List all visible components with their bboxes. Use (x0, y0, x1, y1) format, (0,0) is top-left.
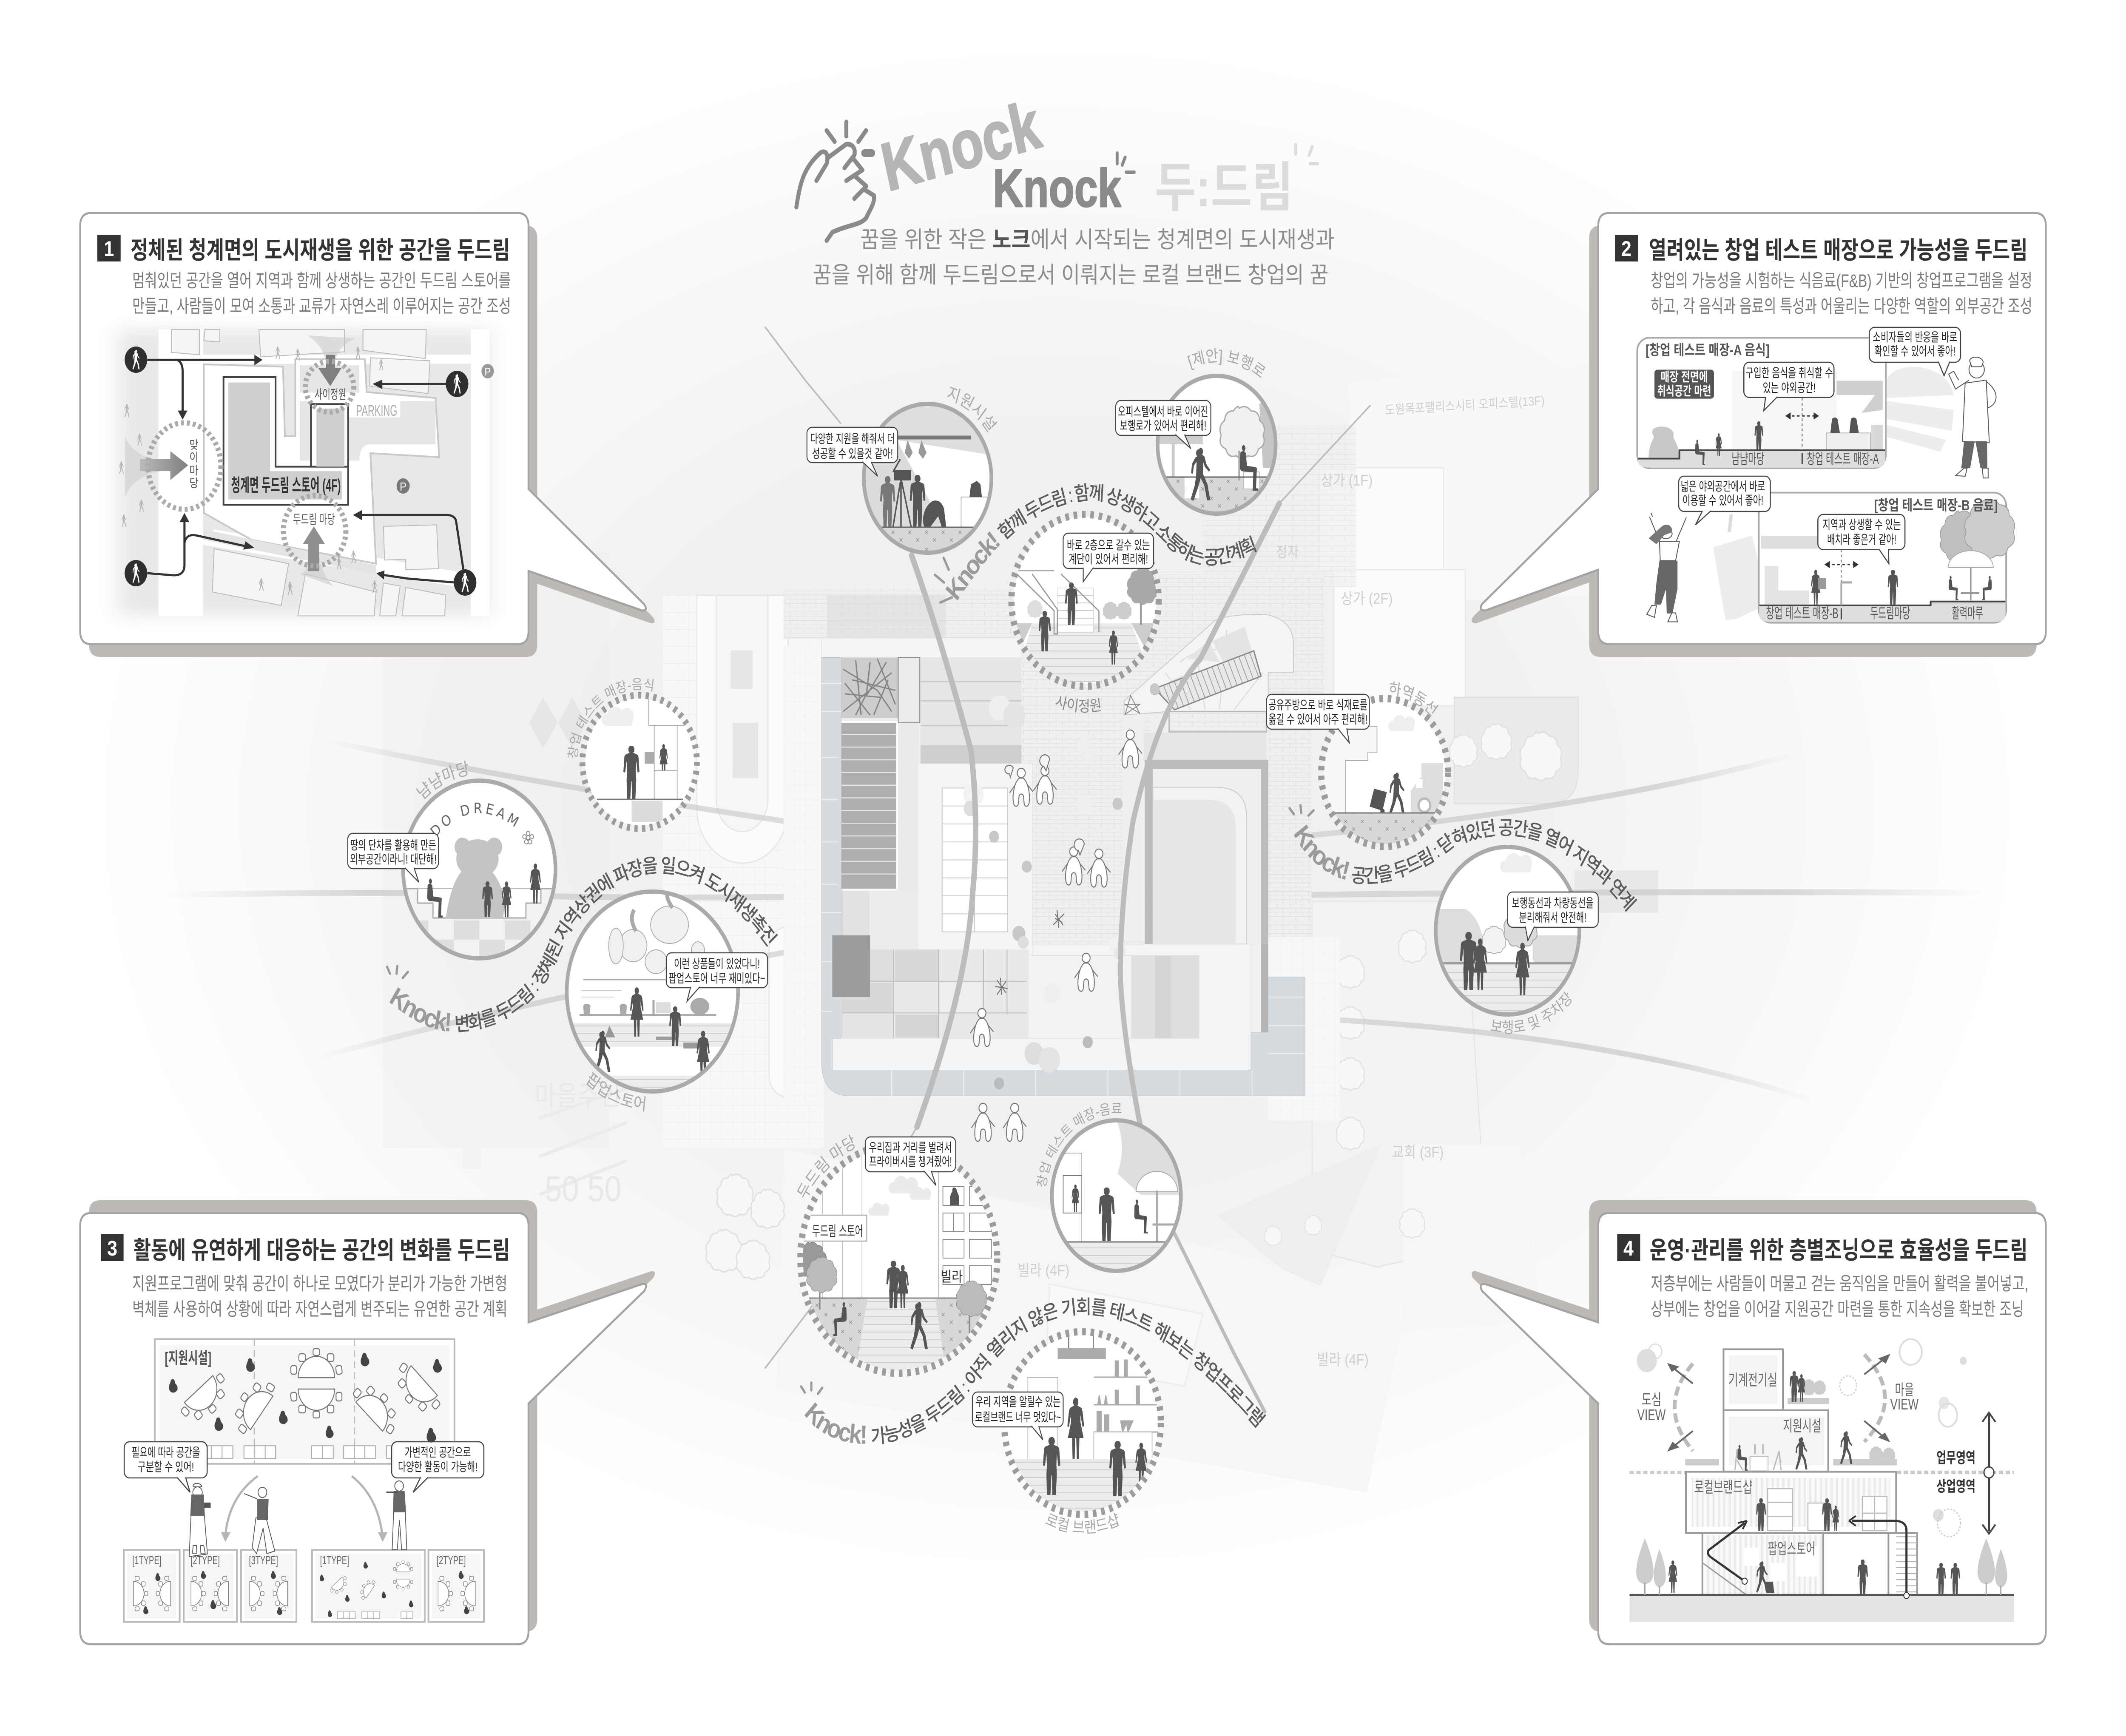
test store diagrams: 있는 야외공간! (1763, 381, 1816, 395)
description 4: 저층부에는 사람들이 머물고 걷는 움직임을 만들어 활력을 불어넣고, (1651, 1274, 2028, 1294)
circle: 하역동선: 공유주방으로 바로 식재료를 (1268, 698, 1367, 712)
test store diagrams: 매장 전면에 (1660, 370, 1708, 384)
background labels: 교회 (3F) (1392, 1144, 1444, 1161)
test store diagrams: 배치라 좋은거 같아! (1827, 533, 1896, 546)
circle: 창업 테스트 매장 음료: 창업 테스트 매장-음료 (1035, 1101, 1122, 1189)
number badge 4 (1617, 1234, 1640, 1261)
circle: 로컬 브랜드샵: 로컬브랜드 너무 멋있다~ (975, 1410, 1061, 1424)
circle: 두드림 마당: 두드림 마당 (794, 1132, 858, 1202)
test store diagrams: 확인할 수 있어서 좋아! (1875, 344, 1955, 358)
curved heading: 함께 두드림: Knock!함께 두드림 : 함께 상생하고 소통하는 공간계획 (941, 482, 1258, 605)
building section diagram: 지원시설 (1783, 1418, 1821, 1435)
circle: 하역동선: 옮길 수 있어서 아주 편리해! (1268, 713, 1367, 726)
building section diagram: 마을 (1895, 1382, 1914, 1399)
circle: 로컬 브랜드샵: 로컬 브랜드샵 (1043, 1511, 1122, 1537)
circle: 팝업스토어: 팝업스토어 너무 재미있다~ (669, 972, 765, 985)
number badge 3 (101, 1234, 124, 1261)
test store diagrams: [창업 테스트 매장-A 음식] (1646, 342, 1770, 358)
building section diagram: 업무영역 (1936, 1449, 1975, 1466)
description 3: 벽체를 사용하여 상황에 따라 자연스럽게 변주되는 유연한 공간 계획 (132, 1299, 507, 1320)
test store diagrams: 지역과 상생할 수 있는 (1822, 518, 1901, 531)
background labels: 빌라 (4F) (1018, 1262, 1069, 1279)
subtitle: 꿈을 위한 작은 노크에서 시작되는 청계면의 도시재생과 (860, 227, 1335, 253)
support facility plan diagram: 필요에 따라 공간을 (131, 1446, 200, 1459)
background labels: 정자 (1276, 544, 1299, 560)
site access map: 사이정원 (315, 387, 346, 401)
circle: 팝업스토어: 팝업스토어 (583, 1069, 648, 1114)
circle: 두드림 마당: 프라이버시를 챙겨줬어! (869, 1155, 952, 1168)
description 1 (132, 271, 511, 317)
circle: 로컬 브랜드샵 (972, 1332, 1161, 1537)
building section diagram: 팝업스토어 (1768, 1541, 1816, 1558)
background labels: 50 50 (545, 1169, 622, 1209)
test store diagrams: 넓은 야외공간에서 바로 (1681, 480, 1765, 493)
test store diagrams: 이용할 수 있어서 좋아! (1683, 494, 1763, 507)
background labels (535, 393, 1545, 1369)
circle: 지원시설 (807, 384, 1000, 557)
circle: 제안 보행로: 오피스텔에서 바로 이어진 (1118, 405, 1208, 418)
support facility plan diagram: 가변적인 공간으로 (404, 1446, 471, 1459)
support facility plan diagram: [2TYPE] (437, 1553, 466, 1567)
background labels: 도원목포팰리스시티 오피스텔(13F) (1384, 393, 1545, 417)
heading 2: 열려있는 창업 테스트 매장으로 가능성을 두드림 (1649, 237, 2028, 264)
icon: knocking hand (796, 122, 874, 241)
circle: 보행로 및 주차장: 분리해줘서 안전해! (1519, 911, 1586, 924)
heading 4: 운영·관리를 위한 층별조닝으로 효율성을 두드림 (1650, 1237, 2028, 1264)
curved heading: 공간을 두드림: Knock!공간을 두드림 : 닫혀있던 공간을 열어 지역과 연계 (1289, 817, 1638, 914)
building section diagram: VIEW (1890, 1396, 1919, 1413)
circle: 지원시설: 성공할 수 있을것 같아! (812, 447, 893, 460)
support facility plan diagram: [1TYPE] (320, 1553, 349, 1567)
description 1: 멈춰있던 공간을 열어 지역과 함께 상생하는 공간인 두드림 스토어를 (132, 271, 511, 291)
title logo: Knock (875, 86, 1047, 205)
circle: 팝업스토어 (567, 884, 767, 1114)
circle: 하역동선: 하역동선 (1388, 680, 1440, 719)
background labels: 마을주민 (535, 1081, 621, 1111)
circle: 로컬 브랜드샵: 우리 지역을 알릴수 있는 (975, 1395, 1060, 1409)
building section diagram: 로컬브랜드샵 (1694, 1479, 1752, 1496)
circle: 제안 보행로: [제안] 보행로 (1185, 347, 1268, 382)
circle: 지원시설: 다양한 지원을 해줘서 더 (810, 432, 895, 446)
subtitle: 꿈을 위해 함께 두드림으로서 이뤄지는 로컬 브랜드 창업의 꿈 (813, 262, 1328, 288)
building section diagram: 도심 (1641, 1392, 1662, 1409)
site access map: 당 (189, 477, 199, 490)
site curve lines (765, 327, 1370, 1412)
circle: 보행로 및 주차장: 보행동선과 차량동선을 (1512, 896, 1594, 910)
circle: 창업 테스트 매장 음식 (566, 676, 697, 829)
circle: 하역동선 (1267, 680, 1451, 847)
circle: 두드림 마당: 우리집과 거리를 벌려서 (869, 1141, 952, 1154)
support facility plan diagram: [1TYPE] (132, 1553, 162, 1567)
test store diagrams: 창업 테스트 매장-B (1766, 605, 1839, 622)
circle: 냠냠마당 (348, 759, 558, 965)
description 3 (132, 1274, 507, 1320)
test store diagrams: [창업 테스트 매장-B 음료] (1874, 497, 1998, 514)
site access map: 맞 (189, 439, 199, 452)
circle: 보행로 및 주차장: 보행로 및 주차장 (1489, 989, 1575, 1037)
title logo: 두:드림 (1155, 158, 1293, 218)
circle: 팝업스토어: 이런 상품들이 있었다니! (674, 957, 760, 971)
circle: 사이정원: 사이정원 (1054, 693, 1103, 715)
background labels: 상가 (2F) (1341, 591, 1393, 608)
circle: 두드림 마당 (794, 1132, 1000, 1378)
title logo (796, 86, 1318, 241)
test store diagrams: 창업 테스트 매장-A (1807, 451, 1879, 467)
panel 1: 공간을 두드림 (80, 213, 655, 657)
number badge 2 (1615, 235, 1638, 261)
test store diagrams (1637, 327, 2015, 623)
circle: 두드림 마당: 두드림 스토어 (812, 1223, 863, 1239)
support facility plan diagram: 구분할 수 있어! (138, 1460, 194, 1474)
subtitle (813, 227, 1335, 288)
circle: 제안 보행로 (1116, 347, 1279, 515)
number badge 3: 3 (107, 1236, 117, 1260)
description 2: 하고, 각 음식과 음료의 특성과 어울리는 다양한 역할의 외부공간 조성 (1651, 296, 2032, 317)
background labels: 빌라 (4F) (1317, 1352, 1369, 1369)
support facility plan diagram: 다양한 활동이 가능해! (398, 1460, 477, 1474)
support facility plan diagram: [지원시설] (165, 1350, 211, 1367)
number badge 1: 1 (104, 237, 114, 261)
site access map: 마 (189, 464, 199, 477)
building section diagram (1629, 1339, 2014, 1622)
circle: 사이정원: 계단이 있어서 편리해! (1069, 552, 1148, 566)
circle: 냠냠마당: 땅의 단차를 활용해 만든 (350, 838, 436, 852)
test store diagrams: 구입한 음식을 취식할 수 (1745, 366, 1833, 380)
heading 1: 정체된 청계면의 도시재생을 위한 공간을 두드림 (131, 237, 510, 264)
circle: 제안 보행로: 보행로가 있어서 편리해! (1120, 419, 1206, 432)
circle: 창업 테스트 매장 음료 (1035, 1101, 1183, 1274)
circle: 냠냠마당: 외부공간이라니! 대단해! (350, 852, 437, 866)
number badge 4: 4 (1623, 1236, 1634, 1260)
curved heading: 변화를 두드림: Knock!변화를 두드림 : 정체된 지역상권에 파장을 일으켜 도시재생촉진 (385, 855, 779, 1037)
description 4 (1651, 1274, 2028, 1320)
site access map: 두드림 마당 (293, 512, 335, 526)
panel 3: 공간의 변화 (80, 1200, 655, 1644)
number badge 2: 2 (1621, 237, 1631, 261)
title logo: Knock (993, 158, 1121, 218)
circle: 보행로 및 주차장 (1432, 847, 1598, 1037)
test store diagrams: 활력마루 (1952, 605, 1983, 622)
heading 3: 활동에 유연하게 대응하는 공간의 변화를 두드림 (134, 1237, 510, 1264)
people in the plan (970, 730, 1142, 1141)
description 3: 지원프로그램에 맞춰 공간이 하나로 모였다가 분리가 가능한 가변형 (132, 1274, 507, 1294)
site access map: 청계면 두드림 스토어 (4F) (231, 476, 341, 496)
site access map (117, 330, 494, 616)
panel 2: 창업 테스트 매장 (1472, 213, 2046, 657)
site access map: PARKING (356, 403, 397, 420)
circle: 냠냠마당: DO DREAM (428, 800, 523, 841)
circle: 냠냠마당: 냠냠마당 (414, 759, 471, 803)
circle: 사이정원: 바로 2층으로 갈수 있는 (1067, 538, 1150, 552)
test store diagrams: 취식공간 마련 (1657, 384, 1711, 398)
background labels: 상가 (1F) (1321, 472, 1373, 489)
description 4: 상부에는 창업을 이어갈 지원공간 마련을 통한 지속성을 확보한 조닝 (1651, 1299, 2024, 1320)
number badge 1 (97, 235, 121, 261)
building section diagram: VIEW (1637, 1407, 1666, 1424)
site access map: P (400, 480, 406, 493)
site access map: P (484, 366, 491, 378)
test store diagrams: 냠냠마당 (1732, 451, 1765, 467)
test store diagrams: 두드림마당 (1870, 605, 1910, 622)
building section diagram: 상업영역 (1936, 1478, 1975, 1495)
support facility plan diagram: [2TYPE] (190, 1553, 220, 1567)
circle: 창업 테스트 매장 음식: 창업 테스트 매장-음식 (566, 676, 655, 760)
panel 4: 층별조닝 (1472, 1200, 2046, 1644)
circle: 두드림 마당: 빌라 (941, 1269, 963, 1285)
description 2: 창업의 가능성을 시험하는 식음료(F&B) 기반의 창업프로그램을 설정 (1651, 271, 2032, 291)
description 2 (1651, 271, 2032, 317)
building section diagram: 기계전기실 (1728, 1372, 1777, 1389)
circle: 사이정원 (1012, 514, 1159, 715)
description 1: 만들고, 사람들이 모여 소통과 교류가 자연스레 이루어지는 공간 조성 (132, 296, 511, 317)
curved heading: 가능성을 두드림: Knock!가능성을 두드림 : 아직 열리지 않은 기회를 테스트 해보는 창업프로그램 (800, 1296, 1267, 1450)
support facility plan diagram (124, 1339, 484, 1622)
site plan (784, 574, 1340, 1120)
test store diagrams: 소비자들의 반응을 바로 (1873, 330, 1957, 344)
support facility plan diagram: [3TYPE] (249, 1553, 278, 1567)
site access map: 이 (189, 451, 199, 464)
circle: 지원시설: 지원시설 (945, 384, 1000, 435)
